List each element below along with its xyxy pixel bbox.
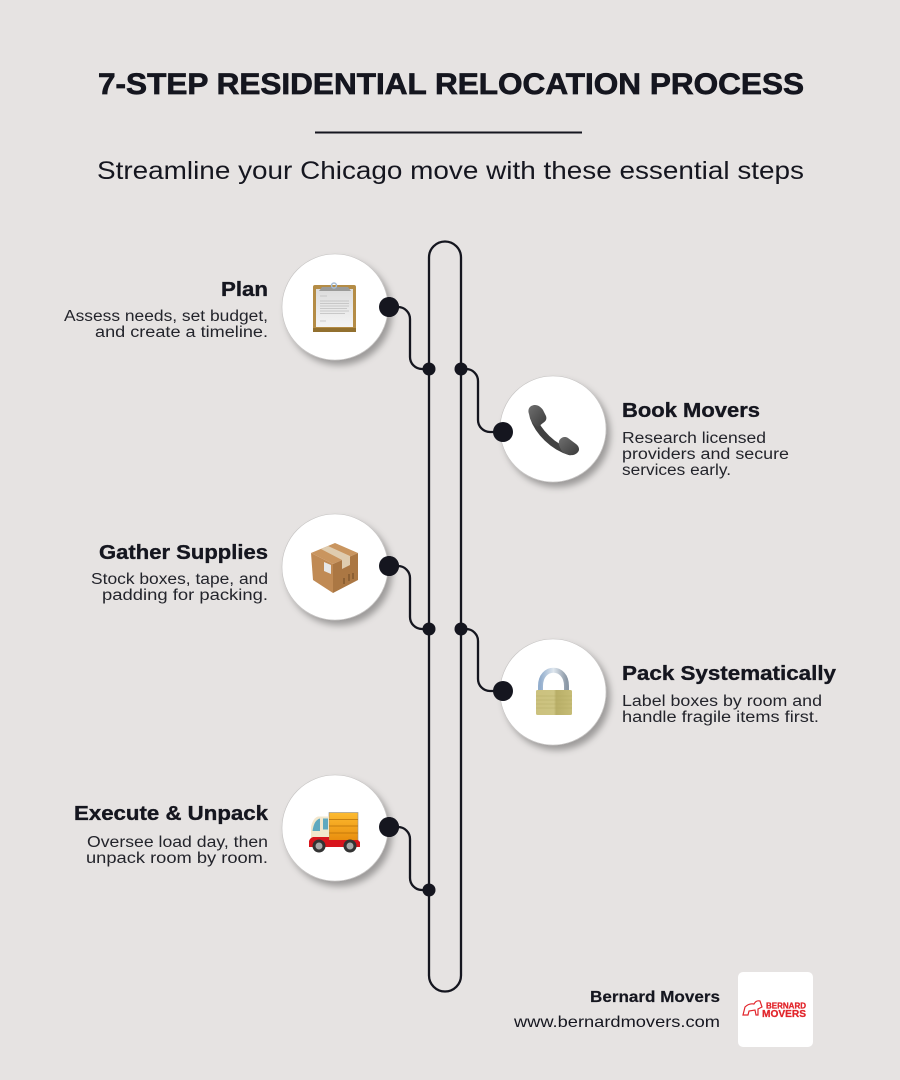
step: book movers [493,376,789,482]
step: execute and unpack [74,775,399,881]
connector: gather supplies [379,556,436,636]
connector: plan [379,297,436,376]
step: plan [64,254,399,360]
connector: book movers [454,362,503,432]
execute and unpack text [74,803,269,867]
plan text: Plan [221,279,268,301]
pack systematically text: Label boxes by room and [622,693,822,710]
book movers text: Research licensed [622,430,766,447]
pack systematically text: Pack Systematically [622,663,837,685]
subtitle: Streamline your Chicago move with these essential steps [97,157,804,185]
logo: bernard movers: BERNARD [766,1000,806,1010]
book movers text: providers and secure [622,446,789,463]
execute and unpack text: Oversee load day, then [87,834,268,851]
icon: cardboard box [282,514,399,620]
gather supplies text [91,542,268,604]
step: pack systematically [493,639,837,745]
logo: bernard movers: MOVERS [762,1008,806,1020]
gather supplies text: Stock boxes, tape, and [91,571,268,588]
execute and unpack text: Execute & Unpack [74,803,269,825]
connector: pack systematically [454,622,503,691]
step: gather supplies [91,514,399,620]
book movers text: services early. [622,462,731,479]
timeline capsule [429,242,461,992]
title: 7-STEP RESIDENTIAL RELOCATION PROCESS [98,68,804,101]
icon: telephone [493,376,606,482]
execute and unpack text: unpack room by room. [86,850,268,867]
connector: execute and unpack [379,817,436,896]
pack systematically text [622,663,837,726]
gather supplies text: Gather Supplies [99,542,268,564]
icon: padlock [493,639,606,745]
footer company name: Bernard Movers [590,989,720,1006]
book movers text: Book Movers [622,400,760,422]
footer website: www.bernardmovers.com [513,1014,720,1031]
plan text: and create a timeline. [95,324,268,341]
plan text [64,279,268,341]
logo: bernard movers [738,972,813,1047]
gather supplies text: padding for packing. [102,587,268,604]
book movers text [622,400,789,479]
icon: delivery truck [282,775,399,881]
icon: clipboard [282,254,388,360]
pack systematically text: handle fragile items first. [622,709,819,726]
plan text: Assess needs, set budget, [64,308,268,325]
